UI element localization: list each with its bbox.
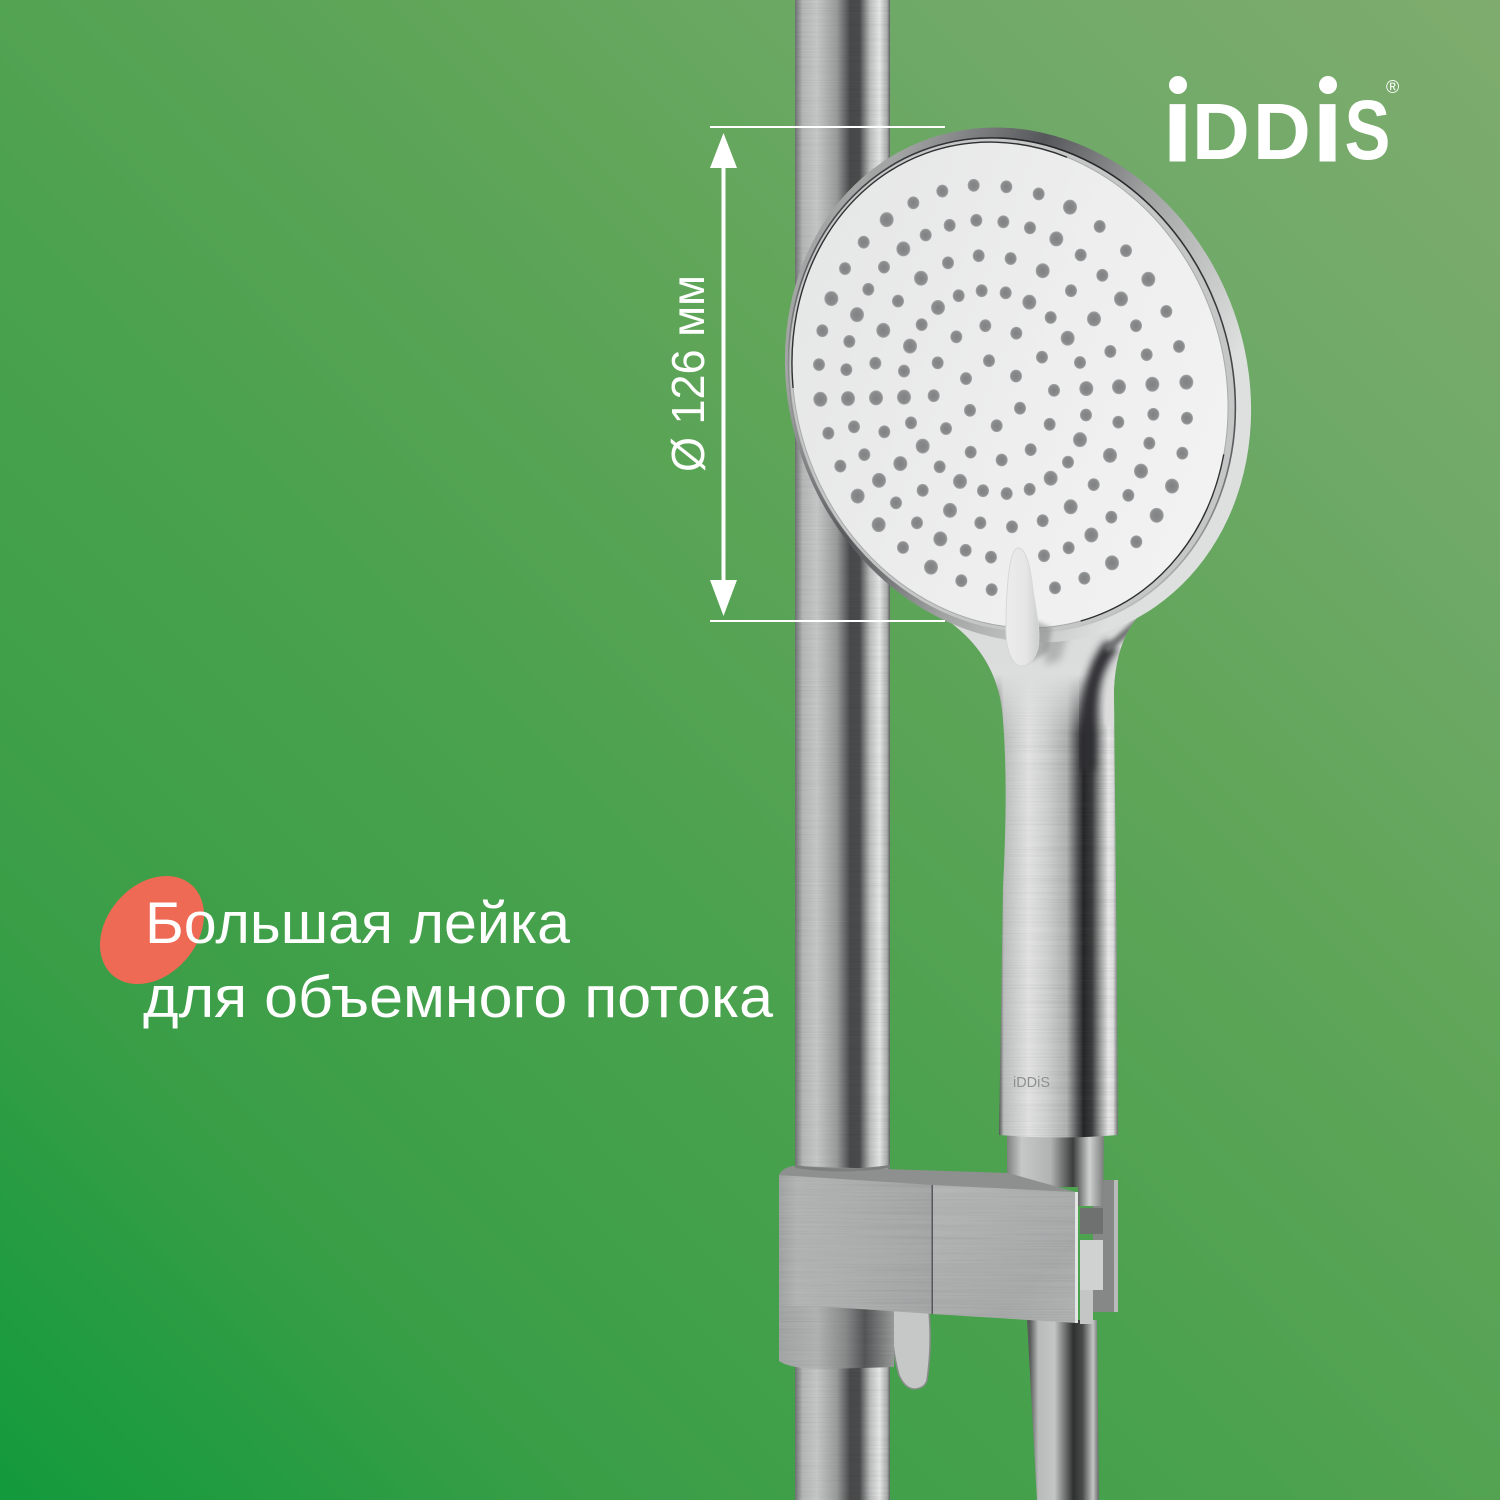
handle collar bbox=[1007, 1130, 1104, 1206]
block seam bbox=[932, 1185, 933, 1314]
double-headed arrow bbox=[710, 133, 737, 616]
spray nozzles bbox=[813, 179, 1193, 596]
IDDIS logo bbox=[1167, 76, 1399, 178]
bracket right block bbox=[932, 1185, 1077, 1323]
shower head bbox=[708, 57, 1328, 713]
head outer rim bbox=[708, 57, 1328, 713]
bracket lower rounded section bbox=[779, 1300, 894, 1369]
dimension marker bbox=[662, 126, 945, 622]
diameter label: Ø 126 мм bbox=[662, 275, 714, 472]
head inner ring bbox=[718, 72, 1306, 698]
shower handle and neck bbox=[952, 618, 1138, 1138]
spray mode hook bbox=[1006, 548, 1039, 666]
bracket left block bbox=[779, 1175, 932, 1314]
IDDIS logo: ® bbox=[1386, 77, 1399, 97]
lever bbox=[890, 1310, 930, 1389]
headline text: Большая лейка bbox=[145, 891, 571, 956]
handle small logo: iDDiS bbox=[1013, 1074, 1050, 1091]
IDDIS logo: D bbox=[1253, 87, 1311, 176]
coral accent blob bbox=[79, 855, 225, 1005]
bottom dimension line bbox=[710, 620, 945, 622]
head white face bbox=[725, 80, 1295, 690]
face dark edge arcs bbox=[725, 80, 1295, 690]
hose bbox=[1027, 1320, 1099, 1500]
headline text bbox=[143, 891, 774, 1030]
IDDIS logo: D bbox=[1192, 87, 1250, 176]
top dimension line bbox=[710, 126, 945, 128]
headline text: для объемного потока bbox=[143, 965, 774, 1030]
bracket top surface bbox=[779, 1166, 1076, 1192]
IDDIS logo: I bbox=[1167, 91, 1188, 176]
bracket bbox=[779, 1165, 1078, 1389]
rod entry lip bbox=[795, 1165, 890, 1172]
IDDIS logo: I bbox=[1317, 91, 1338, 176]
shower rod bbox=[795, 0, 890, 1500]
spray mode hook shadow bbox=[1030, 620, 1052, 662]
IDDIS logo: S bbox=[1344, 85, 1390, 178]
wall mount plate bbox=[1080, 1180, 1118, 1324]
